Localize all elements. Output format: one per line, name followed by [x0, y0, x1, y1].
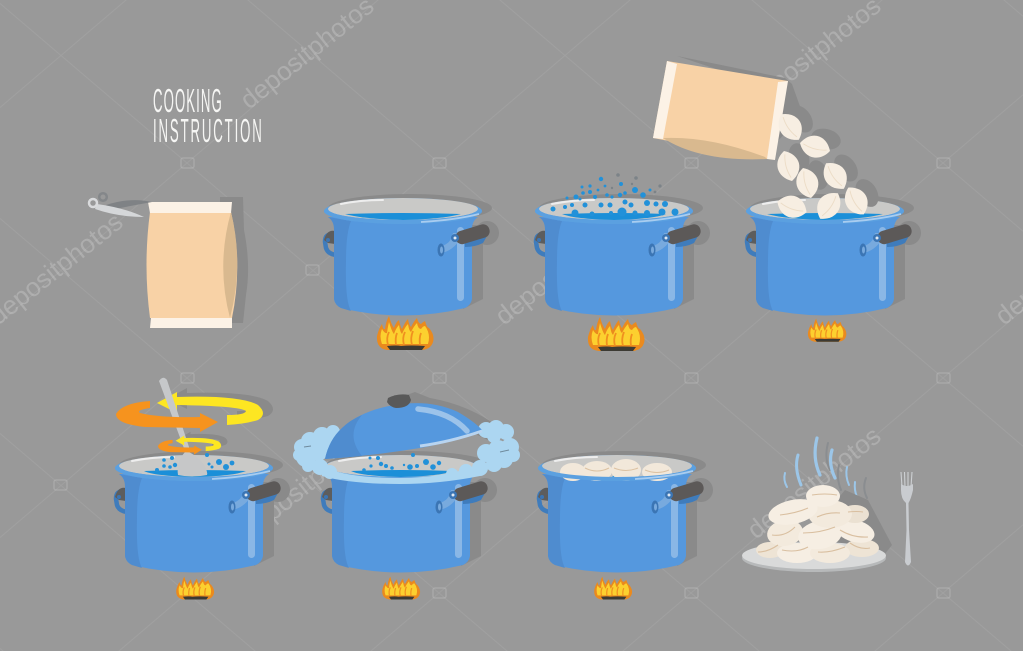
flame [588, 317, 644, 351]
title: INSTRUCTION [153, 113, 262, 150]
step 3: boiling water [535, 173, 710, 351]
pot [746, 194, 921, 316]
bubbles [550, 177, 678, 216]
spinning arrows, small [158, 436, 221, 454]
step 7: dumplings cooking in the pot [538, 451, 713, 599]
flame [176, 577, 214, 599]
step 6: covered pot with foam [293, 392, 520, 599]
step 2: pot with water on flame [324, 194, 499, 350]
bag shadow [160, 197, 248, 323]
pot [538, 451, 713, 572]
icon: scissors [89, 193, 152, 217]
flame [808, 319, 846, 342]
falling dumplings [773, 101, 883, 225]
fork [901, 472, 913, 566]
pot [322, 451, 497, 572]
pot [535, 194, 710, 316]
dumpling pile [756, 485, 879, 563]
flame [377, 316, 434, 350]
step 8: served dumplings [742, 438, 913, 572]
step 4: pouring dumplings [653, 56, 921, 342]
lid [325, 394, 482, 459]
pot [115, 451, 290, 572]
step 1: scissors cutting the bag [89, 193, 248, 328]
plate [742, 490, 892, 572]
watermark: depositphotos [489, 206, 634, 331]
bubbles [362, 453, 441, 472]
floating dumplings [560, 459, 672, 481]
spinning arrow, orange [116, 401, 218, 432]
flame [382, 577, 420, 599]
arrow shadows [167, 388, 273, 447]
spoon [159, 378, 207, 476]
flame [594, 577, 632, 599]
bag [146, 202, 237, 328]
title [153, 83, 262, 150]
foam [293, 420, 520, 484]
spinning arrow, yellow [157, 392, 263, 425]
step 5: stirring [115, 378, 290, 599]
title: COOKING [153, 83, 222, 120]
watermark: depositphotos [235, 420, 380, 545]
poured bag [653, 56, 802, 160]
bubbles [155, 453, 234, 472]
lid shadow [398, 392, 500, 440]
steam [784, 438, 867, 498]
watermark: depositphotos [741, 420, 886, 545]
pot [324, 194, 499, 316]
